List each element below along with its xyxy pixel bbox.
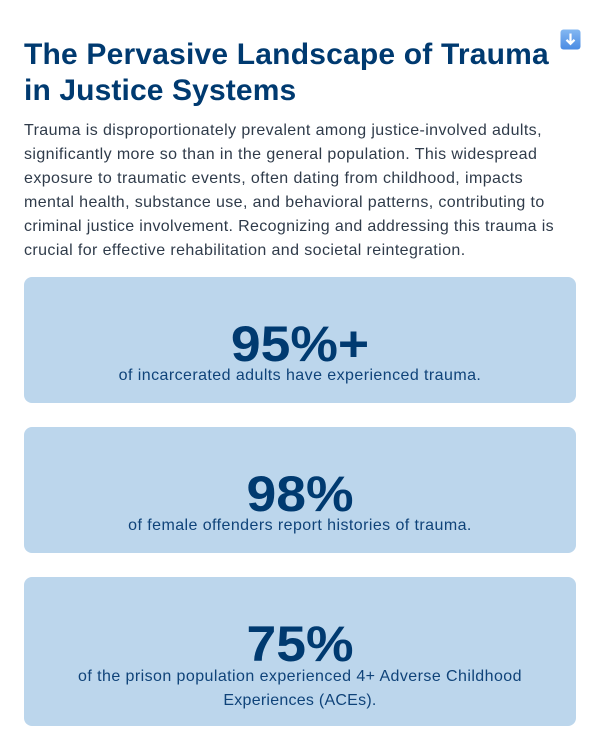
intro text: mental health, substance use, and behavioral patterns, contributing to — [24, 194, 545, 211]
stat caption 75%: of the prison population experienced 4+ Adverse Childhood — [78, 668, 522, 685]
icon: down arrow button — [560, 30, 580, 50]
stat number 75%: 75% — [246, 616, 354, 672]
intro text: Trauma is disproportionately prevalent among justice-involved adults, — [24, 122, 542, 139]
stat caption 75% — [78, 668, 522, 709]
intro text — [24, 122, 554, 259]
title — [24, 38, 549, 107]
stat caption 98%: of female offenders report histories of trauma. — [128, 517, 472, 534]
intro text: exposure to traumatic events, often dating from childhood, impacts — [24, 170, 523, 187]
stat caption 95%: of incarcerated adults have experienced trauma. — [119, 367, 481, 384]
intro text: criminal justice involvement. Recognizing and addressing this trauma is — [24, 218, 554, 235]
stat number 95%: 95%+ — [231, 316, 369, 372]
intro text: significantly more so than in the general population. This widespread — [24, 146, 537, 163]
intro text: crucial for effective rehabilitation and societal reintegration. — [24, 242, 466, 259]
title: The Pervasive Landscape of Trauma — [24, 38, 549, 71]
panel: 95% stat — [24, 277, 576, 403]
panel: 98% stat — [24, 427, 576, 553]
title: in Justice Systems — [24, 74, 296, 107]
stat number 98%: 98% — [246, 466, 354, 522]
panel: 75% stat — [24, 577, 576, 726]
stat caption 75%: Experiences (ACEs). — [223, 692, 377, 709]
